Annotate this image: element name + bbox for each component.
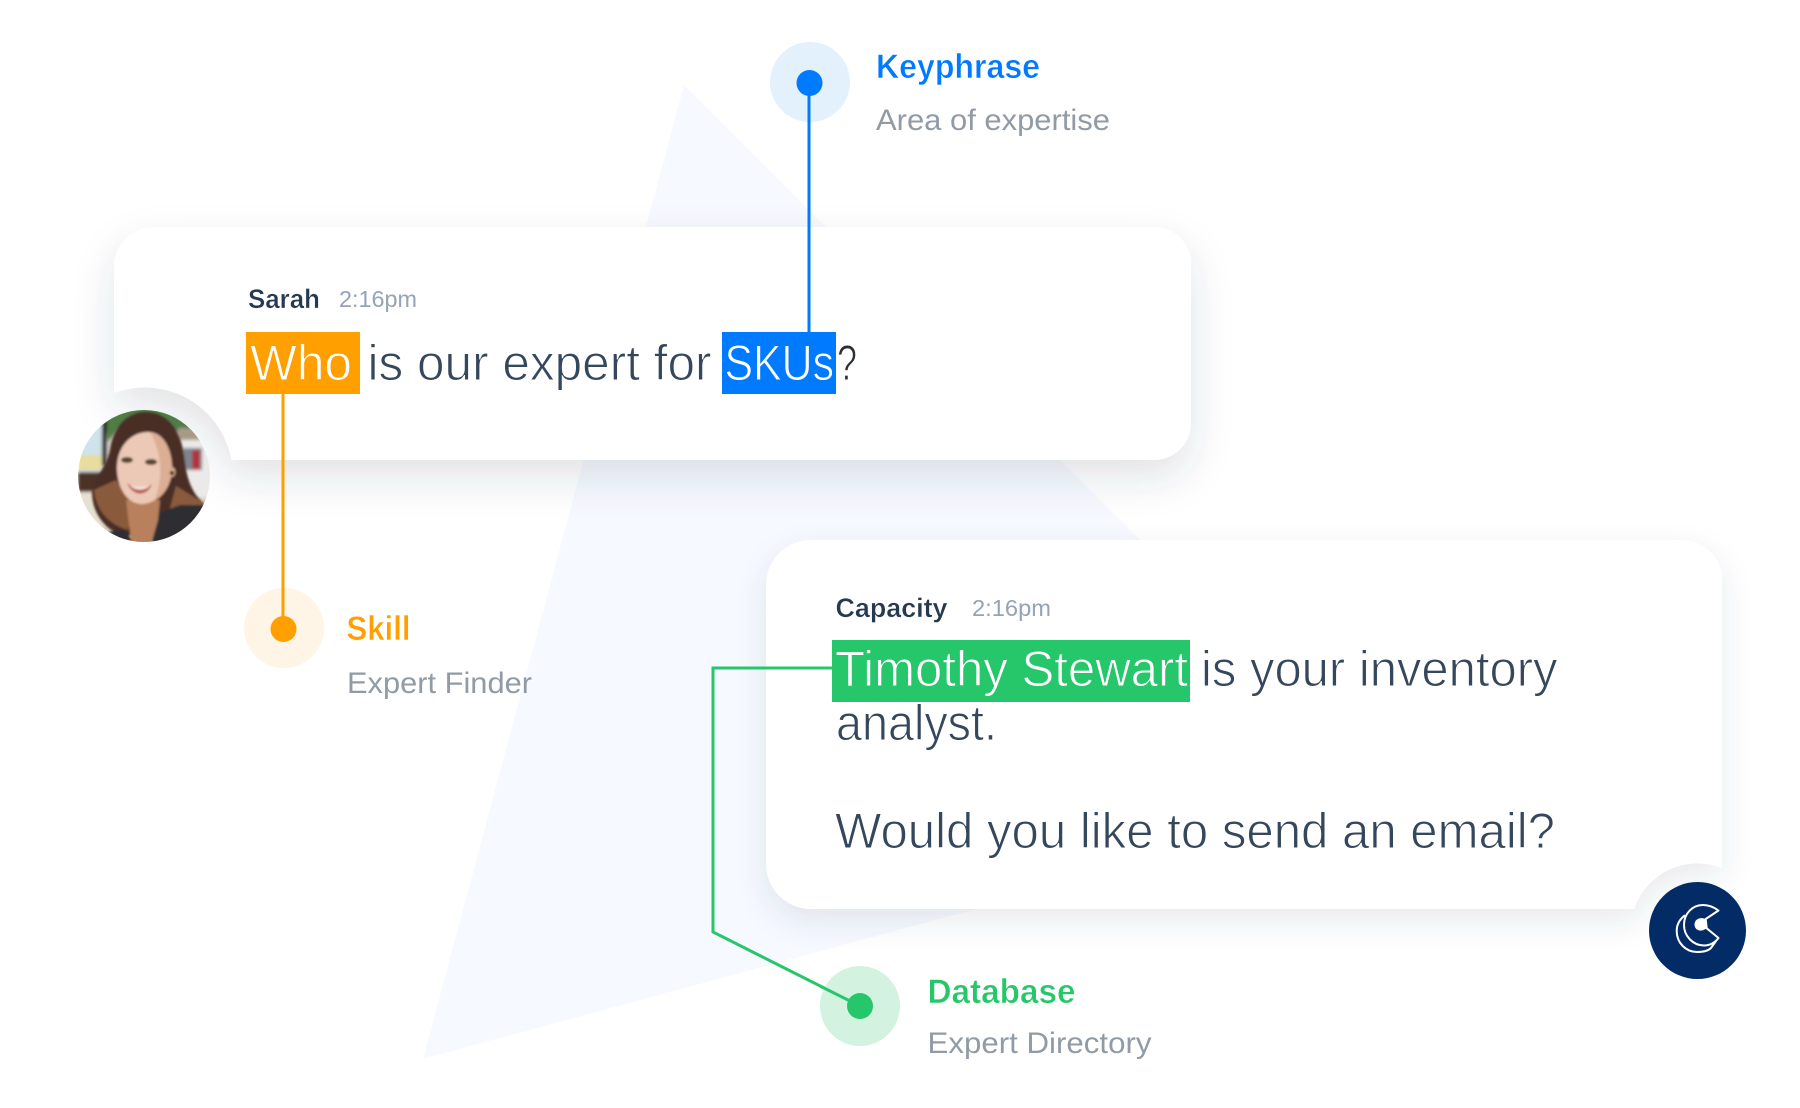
label: Database xyxy=(928,973,1152,1060)
card background with avatar notch xyxy=(114,227,1191,460)
sender name: Sarah: Sarah xyxy=(248,284,320,314)
label: Database: Expert Directory xyxy=(928,1027,1152,1060)
hair lights xyxy=(94,480,204,530)
panel: Sarah message card xyxy=(114,227,1191,460)
label: Skill xyxy=(346,610,532,700)
highlight: Who: Who xyxy=(250,335,352,391)
label: Keyphrase: Keyphrase xyxy=(876,48,1040,86)
marker: Skill xyxy=(244,588,324,668)
icon: Capacity logo xyxy=(1649,882,1746,979)
message text: is your inventory xyxy=(1201,641,1558,697)
message text: is our expert for xyxy=(368,335,712,391)
label: Database: Database xyxy=(928,973,1076,1011)
highlight: SKUs: SKUs xyxy=(724,335,834,391)
connector: orange line xyxy=(282,394,284,628)
background triangle xyxy=(423,85,1396,1059)
highlight: Timothy Stewart: Timothy Stewart xyxy=(835,641,1188,697)
hair xyxy=(92,412,204,536)
label: Skill: Skill xyxy=(346,610,410,648)
message text: analyst. xyxy=(836,695,997,751)
label: Keyphrase: Area of expertise xyxy=(876,104,1110,137)
timestamp: 2:16pm xyxy=(339,286,417,312)
face xyxy=(117,432,172,504)
jacket xyxy=(108,504,204,542)
question mark: ? xyxy=(837,335,857,391)
message text xyxy=(835,641,1558,859)
message text: Would you like to send an email? xyxy=(835,803,1555,859)
timestamp: 2:16pm xyxy=(972,595,1051,621)
marker: Keyphrase xyxy=(770,42,850,122)
connector: green line xyxy=(713,668,860,1006)
avatar: Sarah portrait xyxy=(78,405,212,548)
eyes xyxy=(121,457,133,463)
sender name: Capacity: Capacity xyxy=(836,593,948,623)
card background with logo notch xyxy=(766,540,1722,909)
connector: blue line xyxy=(808,82,810,332)
label: Skill: Expert Finder xyxy=(347,667,532,700)
neck and chest xyxy=(126,500,160,548)
label: Keyphrase xyxy=(876,48,1110,137)
mouth xyxy=(127,483,152,494)
panel: Capacity message card xyxy=(766,540,1722,909)
marker: Database xyxy=(820,966,900,1046)
